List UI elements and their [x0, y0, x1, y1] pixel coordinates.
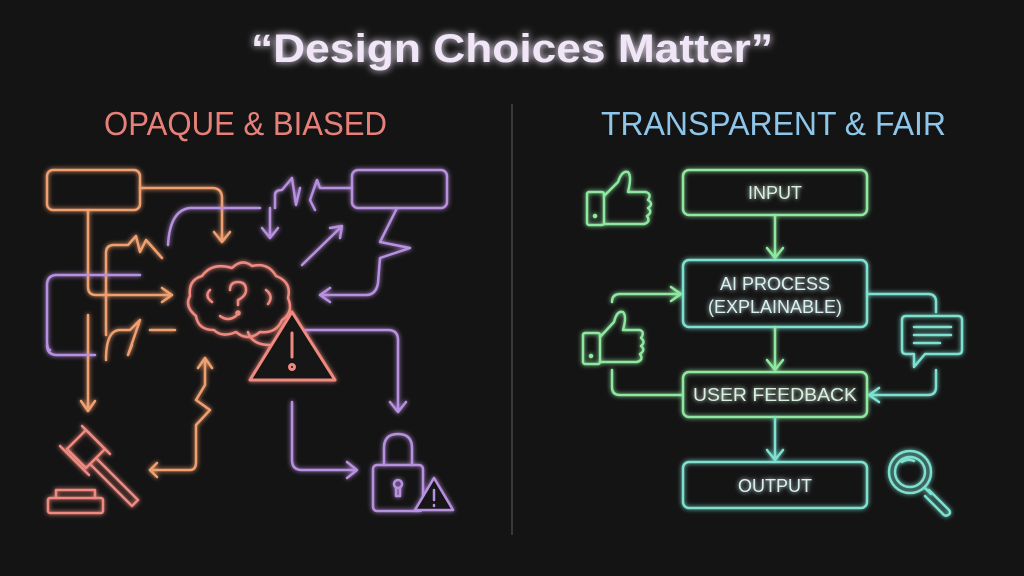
box: AI process [683, 260, 867, 327]
box: user feedback [683, 372, 867, 417]
icon: magnifier [889, 451, 950, 516]
title: “Design Choices Matter” [251, 27, 773, 71]
arrows: orange connections [81, 188, 230, 477]
box: input [683, 170, 867, 215]
arrow: input to process [767, 215, 783, 258]
heading: opaque & biased: OPAQUE & BIASED [104, 105, 387, 142]
box: output: OUTPUT [738, 476, 812, 496]
icon: lock with warning [373, 434, 453, 511]
arrow: process to feedback [767, 327, 783, 370]
icon: gavel [48, 426, 138, 513]
box: AI process: AI PROCESS [720, 274, 830, 294]
panel: opaque & biased diagram [47, 170, 453, 513]
box: AI process: (EXPLAINABLE) [708, 297, 842, 317]
arrows: purple connections [47, 178, 410, 478]
arrow: right feedback loop [867, 294, 936, 402]
box: user feedback: USER FEEDBACK [693, 385, 857, 405]
box: input: INPUT [748, 183, 802, 203]
icon: thumbs up left [583, 312, 644, 364]
box: top-left orange [47, 170, 140, 210]
arrow: feedback to output [767, 417, 783, 460]
arrow: left feedback loop [612, 287, 683, 395]
heading: transparent & fair: TRANSPARENT & FAIR [601, 105, 946, 142]
icon: warning triangle [250, 312, 335, 380]
icon: thumbs up top [587, 172, 651, 225]
box: output [683, 462, 867, 508]
box: top-right purple [352, 170, 447, 208]
icon: brain with question mark [188, 262, 290, 345]
panel: transparent & fair flowchart [583, 170, 962, 516]
icon: chat bubble [902, 316, 962, 367]
